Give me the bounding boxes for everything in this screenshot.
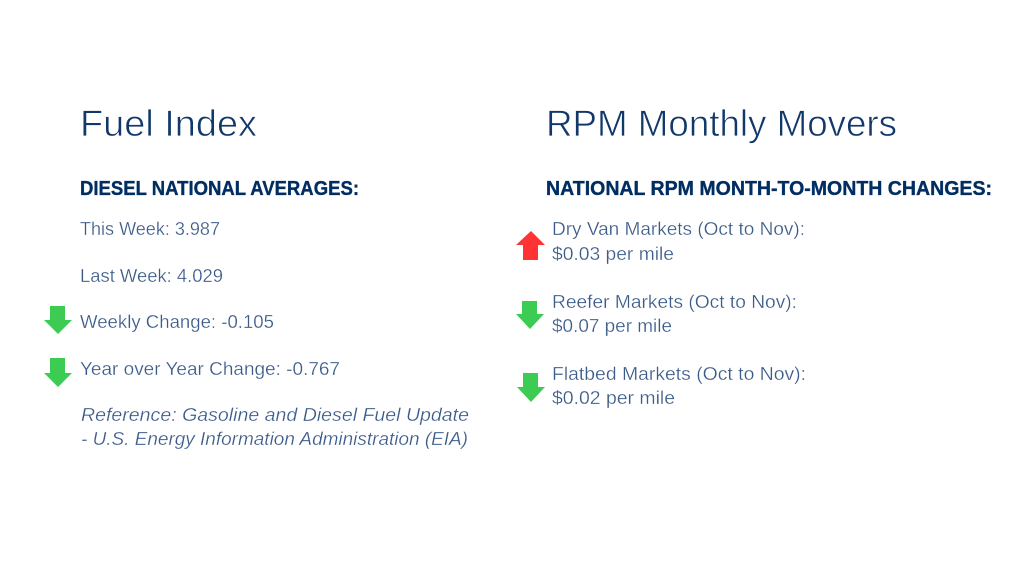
text: reefer markets: Reefer Markets (Oct to Nov): xyxy=(552,292,797,312)
icon: green down arrow, weekly change xyxy=(44,306,72,334)
heading: diesel national averages: DIESEL NATIONAL AVERAGES: xyxy=(80,178,359,200)
text: last week: Last Week: 4.029 xyxy=(80,266,223,286)
text: weekly change: Weekly Change: -0.105 xyxy=(80,312,274,332)
panel: fuel index xyxy=(44,103,469,449)
heading: national rpm month-to-month changes: NATIONAL RPM MONTH-TO-MONTH CHANGES: xyxy=(546,178,992,200)
text: flatbed markets: Flatbed Markets (Oct to Nov): xyxy=(552,364,806,384)
text: reference source xyxy=(81,405,469,449)
text: flatbed markets xyxy=(552,364,806,408)
title: Fuel Index: Fuel Index xyxy=(80,103,257,144)
text: dry van markets: $0.03 per mile xyxy=(552,244,674,264)
text: dry van markets xyxy=(552,219,805,264)
text: dry van markets: Dry Van Markets (Oct to Nov): xyxy=(552,219,805,239)
icon: green down arrow, flatbed xyxy=(517,373,545,402)
icon: red up arrow, dry van xyxy=(516,231,545,260)
panel: rpm monthly movers xyxy=(516,103,992,408)
icon: green down arrow, reefer xyxy=(516,301,544,329)
icon: green down arrow, year over year change xyxy=(44,358,72,387)
title: RPM Monthly Movers: RPM Monthly Movers xyxy=(546,103,897,144)
text: reference source: Reference: Gasoline and Diesel Fuel Update xyxy=(81,405,469,425)
text: reference source: - U.S. Energy Information Administration (EIA) xyxy=(81,429,468,449)
text: flatbed markets: $0.02 per mile xyxy=(552,388,675,408)
text: year over year change: Year over Year Change: -0.767 xyxy=(80,359,340,379)
text: this week: This Week: 3.987 xyxy=(80,219,220,239)
text: reefer markets: $0.07 per mile xyxy=(552,316,672,336)
text: reefer markets xyxy=(552,292,797,336)
